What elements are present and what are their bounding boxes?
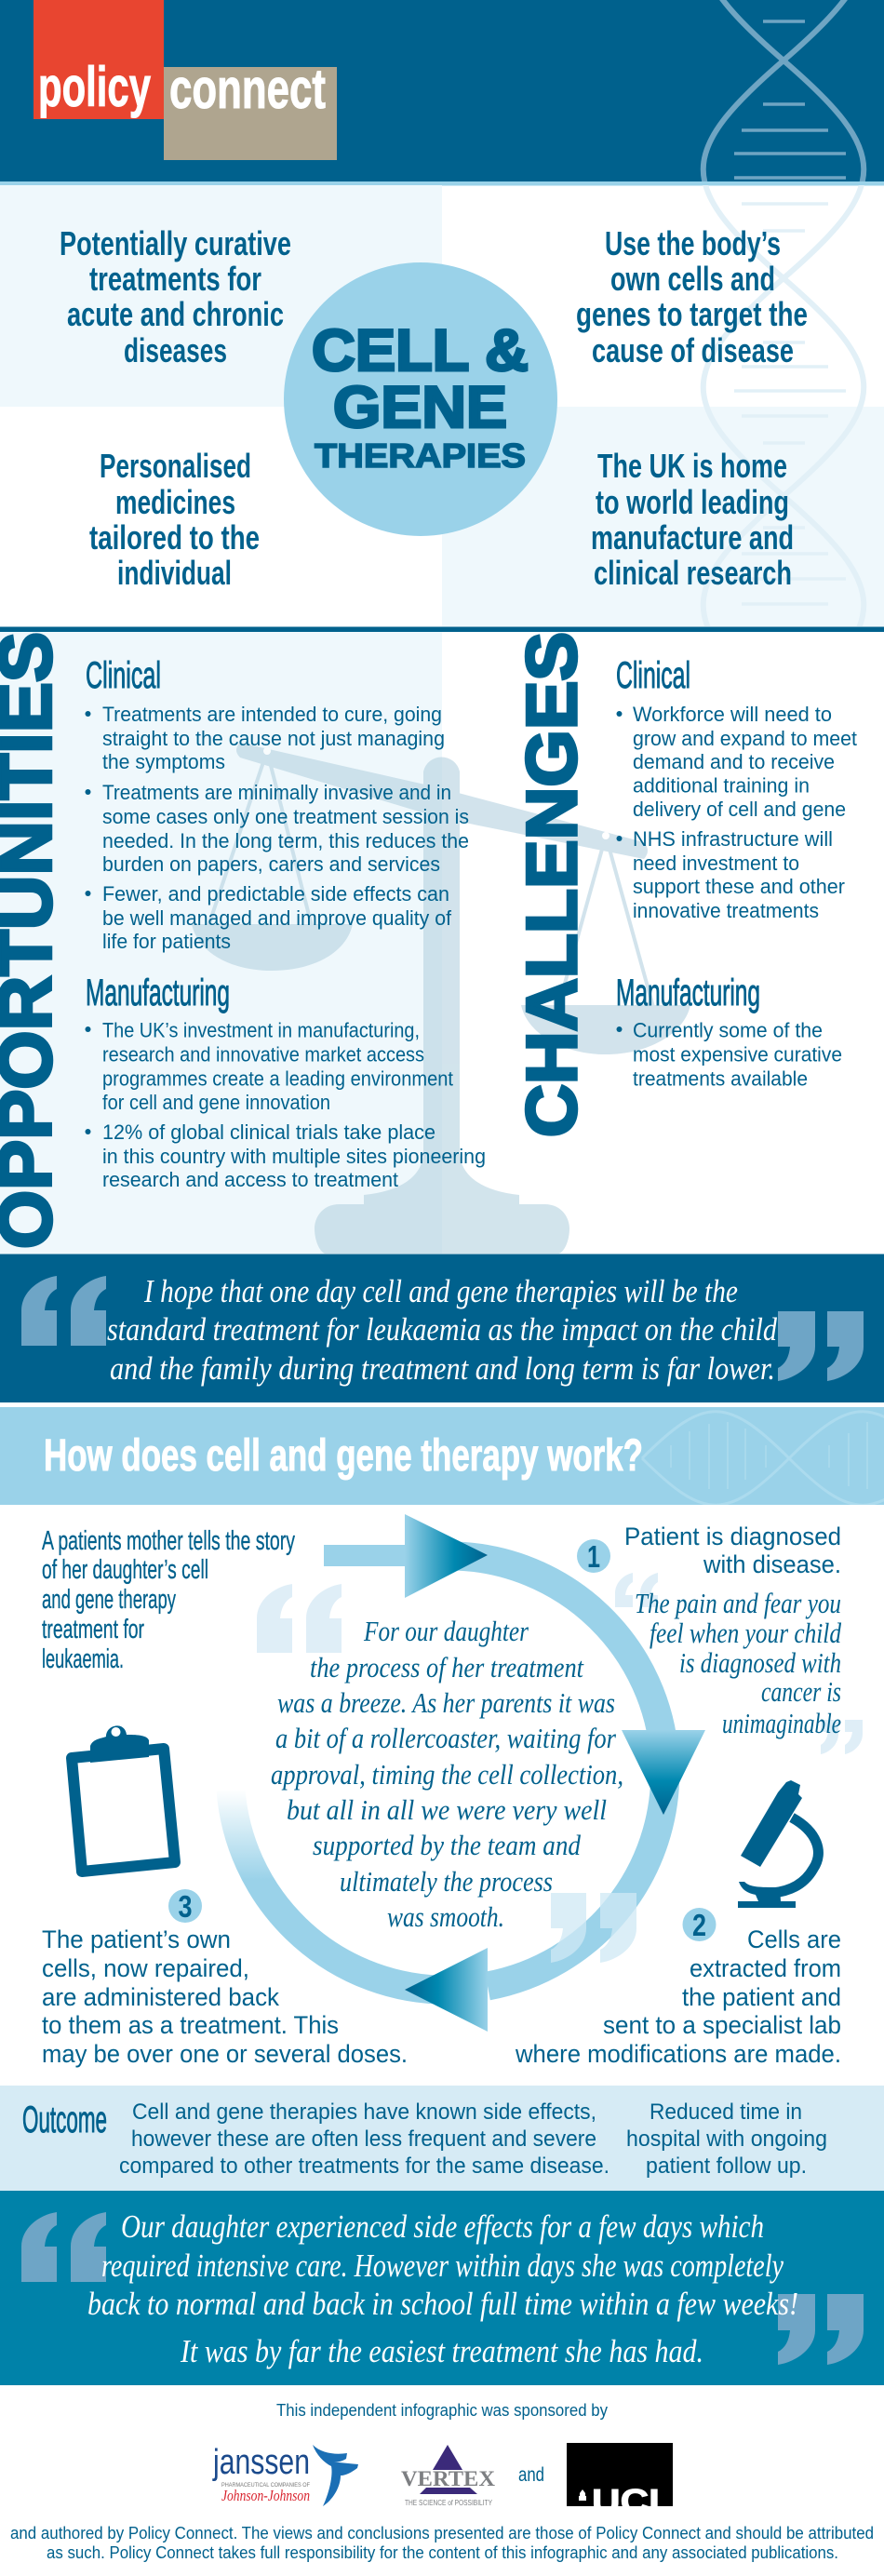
step 2: 2 [692,1908,706,1942]
logo: janssen [212,2443,358,2506]
icon: balance scales watermark [192,743,690,1254]
challenges: clinical: Workforce will need to [633,703,832,726]
step 3: are administered back [42,1983,279,2011]
opportunities: clinical: Fewer, and predictable side effects can [102,882,449,906]
step 3: The patient’s own [42,1925,231,1953]
challenges: clinical: delivery of cell and gene [633,798,846,821]
step 1 [577,1523,841,1578]
panel: outcome: Reduced time in [650,2100,802,2125]
panel: outcome [0,2086,884,2191]
challenges: clinical: demand and to receive [633,750,835,773]
text: personalised medicines [89,447,260,592]
panel: quote band 2: Our daughter experienced side effects for a few days which [121,2208,764,2245]
challenges: clinical: NHS infrastructure will [633,827,833,851]
title circle: GENE [333,375,507,440]
opportunities: manufacturing: research and innovative market access [102,1042,424,1067]
panel: outcome: Cell and gene therapies have known side effects, [132,2100,596,2125]
arrow 2 [622,1730,705,1815]
opportunities: manufacturing: for cell and gene innovation [102,1091,330,1114]
text: and: and [518,2464,544,2486]
text: patient story intro: treatment for [42,1615,144,1644]
step 2: extracted from [690,1954,841,1982]
step 3: cells, now repaired, [42,1954,249,1982]
opportunities: clinical: life for patients [102,930,231,953]
text: the UK is home: manufacture and [591,518,794,557]
quote: pain and fear: cancer is [761,1675,841,1708]
opportunities: clinical: Clinical [86,655,161,696]
arrow 3 [405,1948,488,2032]
panel: outcome: compared to other treatments for the same disease. [119,2153,609,2179]
text: potentially curative: acute and chronic [67,295,284,333]
logo: UCL: UCL [592,2482,673,2520]
logo: vertex: THE SCIENCE of POSSIBILITY [405,2499,493,2507]
challenges: clinical: grow and expand to meet [633,727,858,750]
quote: central patient story: supported by the team and [313,1829,581,1861]
panel: quote band 1: standard treatment for leukaemia as the impact on the child [107,1311,777,1348]
quote: central patient story: a bit of a rollercoaster, waiting for [275,1722,617,1754]
quote: central patient story [271,1615,623,1933]
challenges: clinical [616,655,858,922]
text: patient story intro [42,1526,295,1674]
quote: central patient story: the process of her treatment [310,1651,584,1684]
text: patient story intro: leukaemia. [42,1644,124,1674]
quote: central patient story: but all in all we were very well [287,1793,607,1826]
opportunities: manufacturing: research and access to treatment [102,1168,399,1191]
quote: central patient story: approval, timing the cell collection, [271,1758,623,1791]
opportunities: manufacturing: 12% of global clinical trials take place [102,1120,435,1144]
text: patient story intro: and gene therapy [42,1585,176,1615]
title circle: CELL & [312,318,529,383]
step 1: 1 [587,1539,600,1574]
title circle: THERAPIES [315,436,526,475]
panel: quote band 2: It was by far the easiest treatment she has had. [180,2333,703,2369]
challenges: manufacturing: Manufacturing [616,973,760,1013]
panel: outcome: Outcome [22,2100,107,2140]
DNA helix: intro section [700,185,867,626]
opportunities: clinical: straight to the cause not just managing [102,727,445,750]
text: use the body's own cells: genes to target the [576,295,808,333]
title circle [284,262,557,536]
panel: quote band 1: and the family during treatment and long term is far lower. [110,1350,775,1387]
challenges: manufacturing: treatments available [633,1067,808,1091]
step 2: where modifications are made. [515,2040,841,2068]
quote: central patient story: was smooth. [387,1900,504,1933]
step 2: the patient and [682,1983,841,2011]
opportunities: clinical: the symptoms [102,750,225,773]
text: authorship disclaimer [10,2524,874,2562]
arrow 1 [324,1514,488,1598]
opportunities: manufacturing: Manufacturing [86,973,230,1013]
opportunities: clinical: some cases only one treatment session is [102,805,469,828]
step 3 [42,1889,408,2068]
step 2: sent to a specialist lab [603,2011,841,2039]
challenges: clinical: Clinical [616,655,690,696]
logo: janssen: PHARMACEUTICAL COMPANIES OF [221,2482,310,2489]
quote: central patient story: For our daughter [363,1615,529,1647]
logo: UCL [567,2443,673,2520]
quote: pain and fear: unimaginable [722,1707,841,1739]
opportunities: manufacturing: in this country with multiple sites pioneering [102,1145,486,1168]
text: use the body's own cells: own cells and [610,260,775,298]
text: potentially curative: diseases [124,331,227,369]
challenges: clinical: support these and other [633,875,845,898]
panel: outcome: hospital with ongoing [626,2127,827,2152]
text: personalised medicines: tailored to the [89,518,260,557]
text: sponsorship line: This independent infographic was sponsored by [276,2401,608,2420]
text: personalised medicines: individual [117,554,232,592]
opportunities: clinical: Treatments are minimally invasive and in [102,781,451,804]
text: the UK is home [591,447,794,592]
challenges: clinical: additional training in [633,774,810,797]
text: the UK is home: clinical research [594,554,792,592]
heading: CHALLENGES: CHALLENGES [513,632,592,1137]
intro quadrant panels [0,185,884,626]
logo: janssen: Johnson-Johnson [221,2487,310,2504]
DNA helix: header section [700,0,867,181]
text: potentially curative: Potentially curative [60,224,291,262]
panel: quote band 1 [0,1254,884,1402]
opportunities: clinical [86,655,469,953]
panel: quote band 1: I hope that one day cell and gene therapies will be the [143,1273,738,1309]
logo: vertex: VERTEX [401,2467,495,2490]
text: use the body's own cells: cause of disease [592,331,794,369]
icon: clipboard [72,1725,175,1872]
opportunities: manufacturing [86,973,486,1191]
opportunities: manufacturing: The UK’s investment in manufacturing, [102,1018,420,1042]
text: patient story intro: of her daughter’s cell [42,1555,208,1585]
panel: how does it work heading band: How does cell and gene therapy work? [44,1431,643,1481]
logo: policy connect [33,0,337,160]
text: authorship disclaimer: as such. Policy Connect takes full responsibility for the content of this infographic and any associated publications. [47,2543,838,2562]
quote: pain and fear: The pain and fear you [635,1587,841,1619]
challenges: manufacturing: Currently some of the [633,1018,823,1042]
logo: janssen: janssen [212,2443,310,2482]
panel: outcome: however these are often less frequent and severe [131,2127,596,2152]
step 3: may be over one or several doses. [42,2040,408,2068]
text: the UK is home: The UK is home [597,447,787,485]
step 3: 3 [179,1889,192,1924]
step 1: with disease. [703,1550,841,1578]
quote: pain and fear [615,1573,863,1754]
opportunities: manufacturing: programmes create a leading environment [102,1067,454,1091]
text: patient story intro: A patients mother tells the story [42,1526,295,1556]
panel: quote band 2 [0,2191,884,2385]
panel: outcome: patient follow up. [646,2153,807,2179]
header band [0,0,884,186]
text: use the body's own cells: Use the body’s [605,224,781,262]
step 3: to them as a treatment. This [42,2011,339,2039]
opportunities: clinical: be well managed and improve quality of [102,906,452,930]
step 2 [515,1908,841,2068]
opportunities: clinical: burden on papers, carers and services [102,852,440,876]
logo: policy connect: policy [38,56,151,118]
opportunities: clinical: Treatments are intended to cure, going [102,703,442,726]
icon: microscope [738,1780,818,1908]
quote: pain and fear: is diagnosed with [679,1646,841,1679]
quote marks: central quote [257,1584,636,1963]
panel: how does it work heading band [0,1407,884,1505]
cycle diagram ring [231,1556,665,1990]
opportunities: clinical: needed. In the long term, this reduces the [102,829,469,852]
quote: pain and fear: feel when your child [650,1617,841,1649]
text: use the body's own cells [576,224,808,369]
step 2: Cells are [747,1925,841,1953]
section divider [0,627,884,632]
logo: policy connect: connect [169,58,326,120]
logo: vertex [401,2445,495,2507]
panel: opportunities background [0,632,442,1254]
step 1: Patient is diagnosed [624,1523,841,1550]
challenges: clinical: innovative treatments [633,899,819,922]
challenges: manufacturing: most expensive curative [633,1042,842,1067]
text: potentially curative: treatments for [89,260,261,298]
challenges: clinical: need investment to [633,852,799,875]
text: potentially curative [60,224,291,369]
text: personalised medicines: medicines [115,483,235,521]
text: the UK is home: to world leading [596,483,789,521]
quote: central patient story: was a breeze. As her parents it was [277,1686,615,1719]
text: personalised medicines: Personalised [100,447,251,485]
challenges: manufacturing [616,973,842,1091]
quote: central patient story: ultimately the process [340,1865,553,1898]
